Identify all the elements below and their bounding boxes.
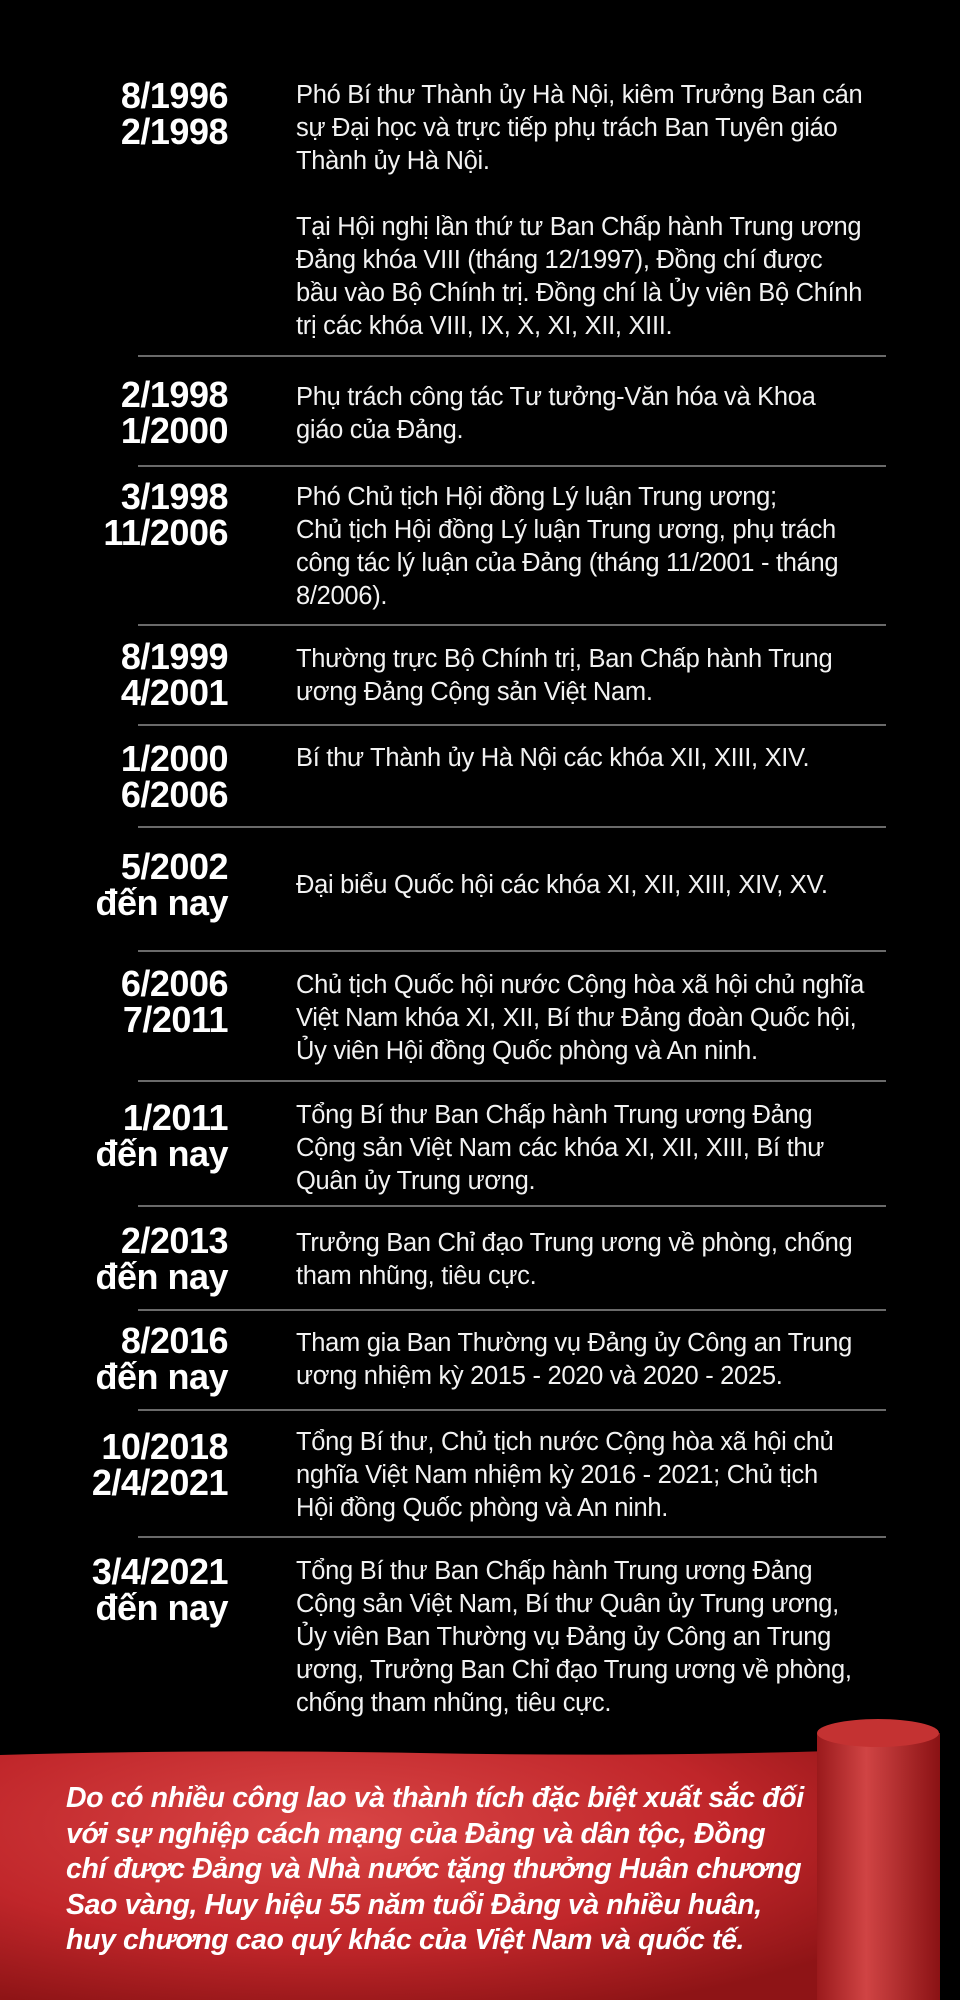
- text: 4/2001: [121, 672, 228, 713]
- text: Hội đồng Quốc phòng và An ninh.: [296, 1494, 668, 1522]
- text: Phó Chủ tịch Hội đồng Lý luận Trung ương;: [296, 483, 777, 511]
- text: Đảng khóa VIII (tháng 12/1997), Đồng chí được: [296, 246, 822, 274]
- row: 8/2016: [95, 1320, 852, 1397]
- text: Chủ tịch Quốc hội nước Cộng hòa xã hội chủ nghĩa: [296, 971, 864, 999]
- text: Tổng Bí thư, Chủ tịch nước Cộng hòa xã hội chủ: [296, 1428, 833, 1456]
- text: công tác lý luận của Đảng (tháng 11/2001 - tháng: [296, 549, 838, 577]
- text: 1/2000: [121, 738, 228, 779]
- banner text: [66, 1782, 805, 1956]
- text: Việt Nam khóa XI, XII, Bí thư Đảng đoàn Quốc hội,: [296, 1004, 856, 1032]
- text: 1/2011: [123, 1097, 228, 1138]
- banner text: Sao vàng, Huy hiệu 55 năm tuổi Đảng và nhiều huân,: [66, 1888, 762, 1920]
- text: Cộng sản Việt Nam các khóa XI, XII, XIII, Bí thư: [296, 1134, 824, 1162]
- text: giáo của Đảng.: [296, 416, 463, 444]
- text: Tham gia Ban Thường vụ Đảng ủy Công an Trung: [296, 1329, 852, 1357]
- text: Tại Hội nghị lần thứ tư Ban Chấp hành Trung ương: [296, 213, 861, 241]
- text: 2/4/2021: [92, 1462, 228, 1503]
- row: 8/1999: [121, 636, 832, 713]
- text: 7/2011: [123, 999, 228, 1040]
- text: Phó Bí thư Thành ủy Hà Nội, kiêm Trưởng Ban cán: [296, 81, 862, 109]
- row: 1/2011: [95, 1097, 824, 1195]
- text: 3/4/2021: [92, 1551, 228, 1592]
- text: Ủy viên Hội đồng Quốc phòng và An ninh.: [296, 1037, 758, 1065]
- text: Quân ủy Trung ương.: [296, 1167, 535, 1195]
- text: 8/1999: [121, 636, 228, 677]
- text: Tổng Bí thư Ban Chấp hành Trung ương Đảng: [296, 1101, 812, 1129]
- text: 2/2013: [121, 1220, 228, 1261]
- text: đến nay: [95, 1256, 228, 1297]
- text: Chủ tịch Hội đồng Lý luận Trung ương, phụ trách: [296, 516, 836, 544]
- text: Tổng Bí thư Ban Chấp hành Trung ương Đảng: [296, 1557, 812, 1585]
- text: Ủy viên Ban Thường vụ Đảng ủy Công an Trung: [296, 1623, 831, 1651]
- row: 3/1998: [103, 476, 838, 610]
- banner text: huy chương cao quý khác của Việt Nam và quốc tế.: [66, 1924, 744, 1956]
- text: tham nhũng, tiêu cực.: [296, 1262, 536, 1290]
- text: 2/1998: [121, 111, 228, 152]
- text: 1/2000: [121, 410, 228, 451]
- row: 2/2013: [95, 1220, 852, 1297]
- text: nghĩa Việt Nam nhiệm kỳ 2016 - 2021; Chủ tịch: [296, 1461, 818, 1489]
- text: 8/2016: [121, 1320, 228, 1361]
- text: đến nay: [95, 1133, 228, 1174]
- text: Đại biểu Quốc hội các khóa XI, XII, XIII, XIV, XV.: [296, 871, 828, 899]
- row: 2/1998: [121, 374, 816, 451]
- text: 6/2006: [121, 963, 228, 1004]
- text: ương nhiệm kỳ 2015 - 2020 và 2020 - 2025.: [296, 1362, 782, 1390]
- text: 10/2018: [101, 1426, 228, 1467]
- row: 8/1996: [121, 75, 862, 340]
- text: Trưởng Ban Chỉ đạo Trung ương về phòng, chống: [296, 1229, 852, 1257]
- text: 8/1996: [121, 75, 228, 116]
- text: đến nay: [95, 1356, 228, 1397]
- text: ương, Trưởng Ban Chỉ đạo Trung ương về phòng,: [296, 1656, 852, 1684]
- text: 2/1998: [121, 374, 228, 415]
- text: Bí thư Thành ủy Hà Nội các khóa XII, XIII, XIV.: [296, 744, 809, 772]
- text: Phụ trách công tác Tư tưởng-Văn hóa và Khoa: [296, 383, 815, 411]
- text: đến nay: [95, 882, 228, 923]
- row: 3/4/2021: [92, 1551, 852, 1717]
- text: 3/1998: [121, 476, 228, 517]
- text: 8/2006).: [296, 582, 387, 610]
- banner text: với sự nghiệp cách mạng của Đảng và dân tộc, Đồng: [66, 1818, 765, 1850]
- row: 1/2000: [121, 738, 809, 815]
- row: 5/2002: [95, 846, 828, 923]
- text: ương Đảng Cộng sản Việt Nam.: [296, 678, 653, 706]
- row: 6/2006: [121, 963, 864, 1065]
- text: Thường trực Bộ Chính trị, Ban Chấp hành Trung: [296, 645, 832, 673]
- text: Cộng sản Việt Nam, Bí thư Quân ủy Trung ương,: [296, 1590, 839, 1618]
- banner text: Do có nhiều công lao và thành tích đặc biệt xuất sắc đối: [66, 1782, 804, 1814]
- red scroll banner: [0, 1719, 940, 2000]
- text: sự Đại học và trực tiếp phụ trách Ban Tuyên giáo: [296, 114, 837, 142]
- text: đến nay: [95, 1587, 228, 1628]
- text: Thành ủy Hà Nội.: [296, 147, 490, 175]
- banner text: chí được Đảng và Nhà nước tặng thưởng Huân chương: [66, 1853, 801, 1885]
- row: 10/2018: [92, 1426, 833, 1522]
- text: 11/2006: [103, 512, 228, 553]
- text: 6/2006: [121, 774, 228, 815]
- text: 5/2002: [121, 846, 228, 887]
- text: chống tham nhũng, tiêu cực.: [296, 1689, 611, 1717]
- text: trị các khóa VIII, IX, X, XI, XII, XIII.: [296, 312, 672, 340]
- text: bầu vào Bộ Chính trị. Đồng chí là Ủy viên Bộ Chính: [296, 279, 862, 307]
